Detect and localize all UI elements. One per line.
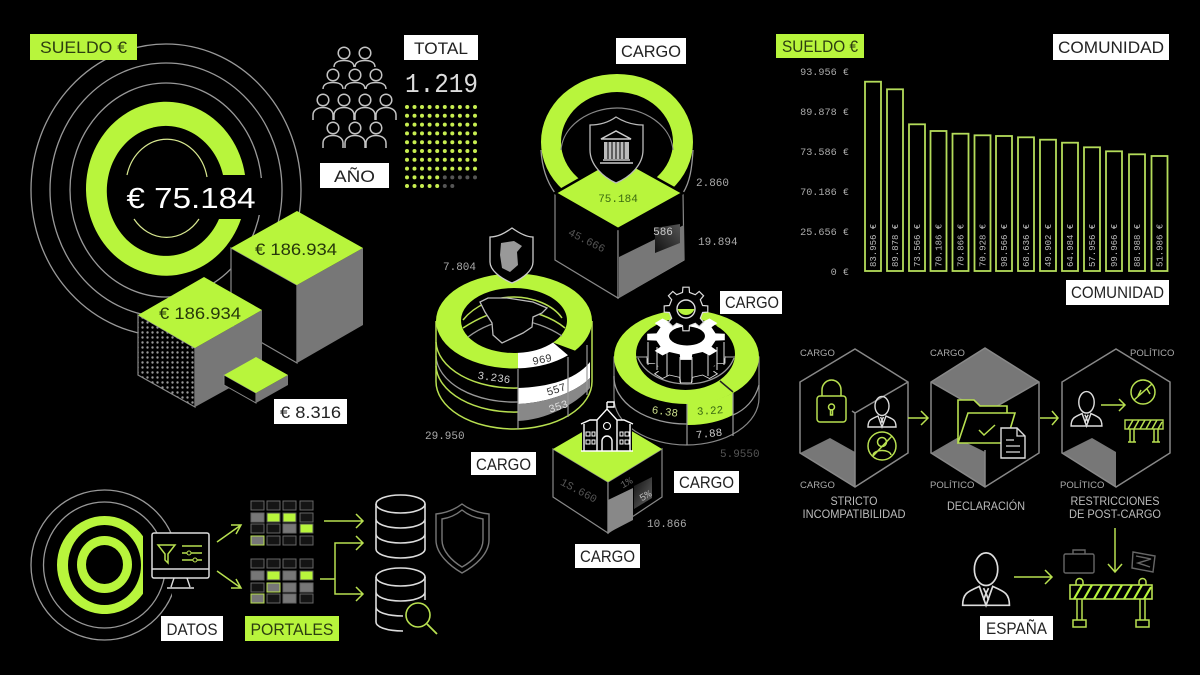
icon: school building [581, 402, 633, 451]
bar chart: 64.984 € [1066, 224, 1076, 267]
hexagon: declaración [931, 348, 1039, 487]
arrow: restriction [1101, 399, 1125, 411]
ring and cube: government: 586 [653, 227, 673, 239]
label: comunidad bottom: COMUNIDAD [1071, 283, 1164, 302]
ring chart: Spain: 969 [531, 353, 553, 369]
arrow: to restricciones [1040, 411, 1058, 425]
heading: sueldo: SUELDO € [40, 38, 128, 57]
bar chart [865, 82, 1168, 271]
y axis labels: 70.186 € [800, 188, 849, 199]
label: comunidad top [1053, 34, 1169, 60]
cube: small [224, 357, 288, 403]
value: 29.950: 29.950 [425, 431, 465, 443]
cube: school: 1S.660 [558, 477, 598, 506]
label: cargo gear: CARGO [725, 293, 779, 312]
bar chart: 68.636 € [1022, 224, 1032, 267]
icon: money [1132, 552, 1155, 572]
ring chart: gear: 3.22 [697, 405, 724, 419]
label: datos: DATOS [166, 620, 218, 639]
label: cargo bottom: CARGO [580, 547, 635, 566]
arrow: to declaración [908, 411, 928, 425]
hexagon labels: POLÍTICO [1060, 480, 1104, 491]
icon: briefcase [1064, 550, 1094, 573]
label: cargo top [616, 38, 686, 64]
dot matrix [405, 105, 477, 188]
bar chart: 70.866 € [956, 224, 966, 267]
bar chart: 51.986 € [1156, 224, 1166, 267]
ring chart: gear [614, 310, 759, 445]
label: portales: PORTALES [250, 620, 334, 639]
ring chart: gear: 6.38 [651, 405, 679, 421]
title: restricciones: RESTRICCIONES [1070, 494, 1160, 508]
icon: person [868, 396, 896, 427]
label: año: AÑO [334, 167, 375, 186]
label: año [320, 163, 389, 188]
arrow: grid two to databases [320, 536, 363, 601]
icon: crowd [313, 47, 396, 148]
bar chart: 83.956 € [869, 224, 879, 267]
ring and cube: government: 45.666 [566, 227, 606, 256]
ring chart: Spain: 3.236 [477, 371, 511, 387]
icon: person [1071, 392, 1102, 426]
label: 8.316: € 8.316 [280, 403, 341, 422]
label: españa: ESPAÑA [986, 619, 1048, 638]
y axis labels: 93.956 € [800, 68, 849, 79]
label: cargo top: CARGO [621, 42, 681, 61]
label: sueldo chart: SUELDO € [782, 37, 858, 56]
y axis labels: 73.586 € [800, 148, 849, 159]
label: comunidad bottom [1066, 280, 1169, 305]
hexagon: incompatibilidad [800, 349, 908, 487]
arrow: grid one to database [324, 514, 363, 528]
title: incompatibilidad: STRICTO [830, 494, 878, 508]
title: incompatibilidad: INCOMPATIBILIDAD [802, 507, 906, 521]
hexagon: restricciones [1062, 349, 1170, 487]
hexagon labels: CARGO [800, 348, 835, 359]
bar chart: 70.928 € [978, 224, 988, 267]
icon: database search [376, 568, 437, 634]
title: declaración: DECLARACIÓN [947, 498, 1025, 513]
bar chart: 88.988 € [1133, 224, 1143, 267]
icon: shield [436, 504, 489, 573]
bar chart: 57.956 € [1088, 224, 1098, 267]
y axis labels: 0 € [831, 268, 849, 279]
icon: lock [817, 380, 846, 422]
cube: school [553, 417, 662, 533]
icon: large white gear [647, 314, 725, 383]
label: 8.316 [274, 399, 347, 424]
target rings [31, 490, 178, 640]
concentric salary rings [31, 44, 301, 336]
icon: database [376, 495, 425, 558]
cube: large: € 186.934 [255, 240, 337, 259]
hexagon labels: CARGO [800, 480, 835, 491]
label: comunidad top: COMUNIDAD [1058, 38, 1164, 57]
ring chart: gear: 7.88 [695, 428, 723, 442]
y axis labels: 89.878 € [800, 108, 849, 119]
ring and cube: government [541, 74, 693, 298]
ring chart: Spain: 353 [547, 399, 570, 417]
arrow: monitor to grid two [217, 571, 241, 588]
heading: sueldo [30, 34, 137, 60]
bar chart: 73.566 € [913, 224, 923, 267]
title: restricciones: DE POST-CARGO [1069, 507, 1161, 521]
label: total [404, 35, 478, 60]
ring and cube: government: 75.184 [598, 194, 638, 206]
bar chart: 49.902 € [1044, 224, 1054, 267]
y axis labels [800, 68, 849, 279]
icon: prohibited [1131, 380, 1155, 404]
data grid one [251, 501, 313, 545]
icon: document [1001, 428, 1025, 458]
arrow: down to barrier [1108, 528, 1122, 572]
cube: school: 1% [619, 476, 635, 492]
value: 19.894: 19.894 [698, 237, 738, 249]
bar chart: 99.966 € [1110, 224, 1120, 267]
bar chart: 98.566 € [1000, 224, 1010, 267]
icon: folder [958, 400, 1015, 443]
bar chart: 70.186 € [934, 224, 944, 267]
value: 7.804: 7.804 [443, 262, 476, 274]
cube: dotted [138, 277, 262, 407]
icon: small outlined gear [664, 287, 708, 331]
icon: small barrier [1125, 420, 1163, 442]
label: cargo left: CARGO [476, 455, 531, 474]
cube: dotted: € 186.934 [159, 304, 241, 323]
ring chart: Spain [436, 274, 592, 429]
cube: large [231, 211, 363, 363]
hexagon labels: CARGO [930, 348, 965, 359]
y axis labels: 25.656 € [800, 228, 849, 239]
title: restricciones [1069, 494, 1161, 521]
label: cargo right: CARGO [679, 473, 734, 492]
total value: 1.219 [405, 71, 478, 101]
icon: Spain shield [490, 228, 533, 283]
hexagon labels: POLÍTICO [1130, 348, 1174, 359]
value: 5.9550: 5.9550 [720, 449, 760, 461]
icon: monitor [152, 533, 209, 588]
icon: big barrier [1070, 578, 1152, 627]
label: datos [161, 616, 223, 641]
data grid two [251, 559, 313, 603]
arrow: to barrier [1014, 570, 1052, 584]
value: 2.860: 2.860 [696, 178, 729, 190]
bar chart: 89.878 € [891, 224, 901, 267]
value: 10.866: 10.866 [647, 519, 687, 531]
icon: no person [868, 432, 896, 460]
hexagon labels [800, 348, 1174, 491]
hexagon labels: POLÍTICO [930, 480, 974, 491]
arrow: monitor to grid one [217, 525, 241, 542]
ring chart: Spain: 557 [545, 382, 568, 400]
icon: politician [963, 553, 1009, 605]
main salary value: € 75.184 [126, 183, 256, 215]
label: total: TOTAL [414, 39, 468, 58]
cube: school: 5% [638, 489, 654, 505]
title: incompatibilidad [802, 494, 906, 521]
